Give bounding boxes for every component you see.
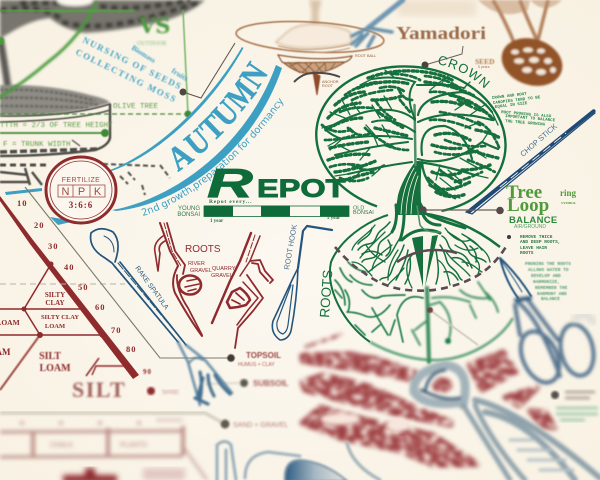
triangle region labels: [0, 291, 79, 374]
crown notes: THE TREE GROWING: [505, 120, 546, 128]
roots labels: QUARRY: [212, 266, 236, 272]
crown notes: IMPORTANT TO BALANCE: [505, 115, 556, 123]
second soil row: [205, 379, 289, 388]
yamadori tree trunk: [309, 0, 322, 28]
tree loop title: SYMBOL: [561, 201, 577, 205]
triangle region labels: LOAM: [39, 363, 71, 374]
scissors handles: [513, 298, 598, 389]
trunk flare: [392, 205, 465, 240]
anchor wire: [294, 73, 340, 82]
connector to crown: [425, 46, 463, 65]
blue nursing labels: COLLECTING MOSS: [74, 47, 177, 104]
connector dot left: [419, 206, 427, 214]
repot heading: [207, 161, 346, 206]
right root notes: AND DEEP ROOTS,: [520, 239, 561, 245]
repot timeline: BONSAI: [353, 210, 374, 216]
triangle scale numbers: 50: [78, 282, 88, 292]
red block paper highlights: [320, 413, 410, 432]
roots label: ROOTS: [317, 269, 335, 318]
fertilize badge: N: [62, 186, 70, 198]
root pruning connector: [427, 307, 433, 313]
root hook tool: [272, 226, 332, 340]
crown dot: [422, 62, 428, 68]
topsoil dot: [227, 354, 235, 362]
root circle: [330, 213, 513, 360]
tree loop title: Loop: [507, 195, 549, 216]
right root notes: LEAVE HAIR: [520, 245, 547, 251]
triangle region labels: LOAM: [45, 323, 65, 330]
arch: [402, 230, 440, 240]
autumn heading: U: [204, 93, 246, 134]
autumn heading: M: [218, 73, 263, 117]
extra foliage: [322, 74, 500, 198]
green tree height labels: F = TRUNK WIDTH: [3, 141, 71, 149]
green tree height labels: OLIVE TREE: [113, 103, 159, 111]
fertilize badge: FERTILIZE: [62, 177, 100, 184]
right root notes: ROOTS: [520, 250, 534, 256]
fertilize badge: P: [78, 186, 85, 198]
root hook label: ROOT HOOK: [282, 224, 299, 270]
twigs: [322, 70, 498, 198]
green tree height labels: TTTH = 2/3 OF TREE HEIGHT: [0, 122, 113, 130]
chop stick: [466, 110, 595, 214]
left strands: [358, 222, 410, 284]
roots labels: GRAVEL: [190, 268, 212, 274]
triangle scale numbers: [17, 198, 152, 376]
tree crown illustration: [322, 70, 500, 215]
crown notes: ROOT PRUNING IS ALSO: [501, 111, 552, 119]
roots labels: RIVER: [188, 261, 205, 267]
autumn arcs: [5, 47, 282, 225]
green tree height labels: [0, 103, 159, 149]
pruning notes: HARMONY AND: [537, 291, 567, 297]
scissors tool: [500, 258, 531, 298]
pot foliage: [0, 85, 110, 116]
blurred silt sublabel: SAND: [162, 390, 179, 396]
pruning notes: REMEMBER THE: [535, 285, 568, 291]
bonsai pot: [0, 104, 170, 195]
soil table: [0, 420, 207, 480]
lower roots: [335, 262, 423, 342]
balance label: BALANCE: [509, 215, 558, 226]
repot heading: R: [207, 161, 253, 206]
triangle region labels: SILTY: [45, 291, 65, 299]
triangle scale numbers: 90: [143, 368, 152, 376]
silt axis: [0, 390, 65, 396]
blurred loop on right: [572, 315, 594, 325]
seed years label: 5 years: [478, 65, 490, 69]
VS label: VS: [138, 13, 170, 38]
fertilize badge: K: [94, 186, 102, 198]
repot timeline: Repot every...: [209, 199, 252, 205]
triangle scale numbers: 30: [48, 241, 58, 251]
triangle scale numbers: 40: [64, 262, 74, 272]
grey curved stroke: [397, 250, 457, 262]
tongs tool: [414, 365, 600, 480]
crown label: CROWN: [438, 56, 490, 88]
soil triangle chart: [0, 196, 139, 390]
faded lower roots: [412, 282, 498, 362]
tree loop title: [506, 182, 577, 216]
rake head: [178, 342, 232, 405]
tree trunk: [395, 161, 428, 215]
right root notes: REMOVE THICK: [520, 234, 553, 240]
right strands: [436, 232, 486, 284]
silt dot: [147, 387, 155, 395]
triangle region labels: CLAY: [45, 299, 65, 307]
blue rake tool: [352, 0, 403, 47]
repot timeline: 1 year: [210, 219, 224, 224]
seed label: SEED: [475, 57, 495, 66]
pruning notes: BALANCE: [541, 296, 560, 302]
red blurred text blocks: [302, 334, 555, 465]
crown notes: CANOPIES TEND TO BE: [493, 96, 541, 106]
dashed soil line: [335, 245, 507, 291]
humus label: HUMUS + CLAY: [238, 362, 275, 368]
repot timeline: 5 year: [327, 216, 341, 221]
repot timeline: BONSAI: [177, 212, 200, 218]
rake spatula label: RAKE SPATULA: [133, 265, 170, 311]
blurred table bottom text: [63, 468, 185, 480]
main branches: [325, 78, 452, 174]
small anchor labels: ROOT BALL: [355, 54, 376, 58]
pruning notes: PRUNING THE ROOTS: [525, 261, 571, 267]
extra strands: [352, 225, 490, 288]
fertilize badge: 3:6:6: [69, 200, 93, 210]
autumn heading: N: [232, 56, 275, 94]
small anchor labels: [322, 54, 376, 88]
repot heading: EPOT: [257, 175, 346, 203]
triangle dashed line: [0, 283, 125, 285]
trunk highlights: [401, 168, 418, 214]
green measurement lines: [0, 2, 192, 137]
triangle scale numbers: 70: [111, 325, 122, 335]
chop stick label: CHOP STICK: [518, 122, 559, 159]
blurred text strip above yamadori: [398, 0, 476, 16]
note dot: [507, 235, 511, 239]
roots labels: ROOTS: [185, 244, 221, 255]
triangle scale numbers: 10: [17, 198, 28, 208]
crown notes: EQUAL IN SIZE: [495, 102, 528, 110]
crown circle: [316, 66, 506, 211]
tree loop title: ring: [560, 188, 577, 198]
yamadori pot illustration: [235, 18, 385, 95]
river gravel root: [155, 223, 202, 336]
soil table: PLANTS: [120, 442, 148, 449]
upper roots: [352, 205, 490, 288]
pruning notes: [525, 261, 571, 302]
right root notes: [520, 234, 561, 256]
triangle scale numbers: 60: [95, 302, 106, 312]
quarry gravel root: [212, 233, 273, 348]
root pruning connector line: [430, 310, 478, 345]
pruning notes: ALLOWS WATER TO: [528, 267, 569, 273]
third soil row: [0, 413, 288, 429]
right blurred label dot: [551, 391, 559, 399]
seed tree with root ball: [478, 0, 569, 93]
VS sublabel: OUTDOOR: [137, 41, 166, 47]
triangle region labels: SILTY CLAY: [41, 314, 79, 321]
rake spatula tool: [91, 229, 186, 345]
connector to yamadori: [183, 43, 235, 98]
crown notes: [492, 93, 556, 128]
repot timeline: YOUNG: [178, 206, 200, 212]
crown notes: CROWN AND ROOT: [492, 93, 528, 101]
small anchor labels: ANCHOR: [322, 80, 339, 84]
roots labels: [185, 244, 236, 279]
pruning notes: HARMONIZE,: [533, 279, 560, 285]
roots labels: GRAVEL: [211, 273, 233, 279]
repot timeline: [177, 199, 374, 224]
balance connector: [423, 209, 500, 211]
central stem: [414, 105, 416, 165]
silt big label: SILT: [72, 377, 126, 402]
blue nursing labels: Biomass: [130, 43, 157, 65]
repot timeline: OLD: [353, 206, 364, 212]
silt axis ticks: [0, 402, 150, 404]
bonsai canopy illustration: [0, 0, 205, 88]
right blurred labels: [556, 392, 598, 420]
soil table: CHALK: [50, 442, 74, 449]
fertilize badge: [46, 157, 116, 223]
autumn subtitle: 2nd growth,preparation for dormancy: [141, 98, 284, 216]
small anchor labels: ROOT: [322, 84, 334, 88]
root samples: [155, 223, 273, 348]
triangle scale numbers: 80: [126, 344, 136, 354]
autumn heading: U: [177, 121, 217, 163]
blue nursing labels: fruits: [170, 66, 190, 83]
blue nursing labels: NURSING OF SEEDS: [81, 35, 183, 91]
triangle region labels: SILT: [39, 351, 61, 362]
bottom spoon tools: [217, 442, 380, 480]
third soil row: SAND + GRAVEL: [233, 422, 288, 429]
autumn heading: [160, 56, 275, 178]
autumn heading: A: [160, 135, 200, 178]
pruning notes: DEVELOP AND: [531, 273, 561, 279]
yamadori title: Yamadori: [396, 23, 486, 43]
triangle scale numbers: 20: [34, 220, 44, 230]
central wedges: [412, 235, 438, 287]
autumn heading: T: [192, 107, 232, 148]
foliage clusters: [326, 71, 500, 197]
connector dot right: [496, 207, 504, 214]
second soil row: SUBSOIL: [253, 379, 289, 388]
air ground label: AIR/GROUND: [514, 224, 546, 230]
tree loop title: Tree: [506, 182, 542, 203]
gray soil connector: [25, 187, 231, 358]
topsoil label: TOPSOIL: [246, 351, 281, 360]
connector dot: [180, 88, 186, 96]
